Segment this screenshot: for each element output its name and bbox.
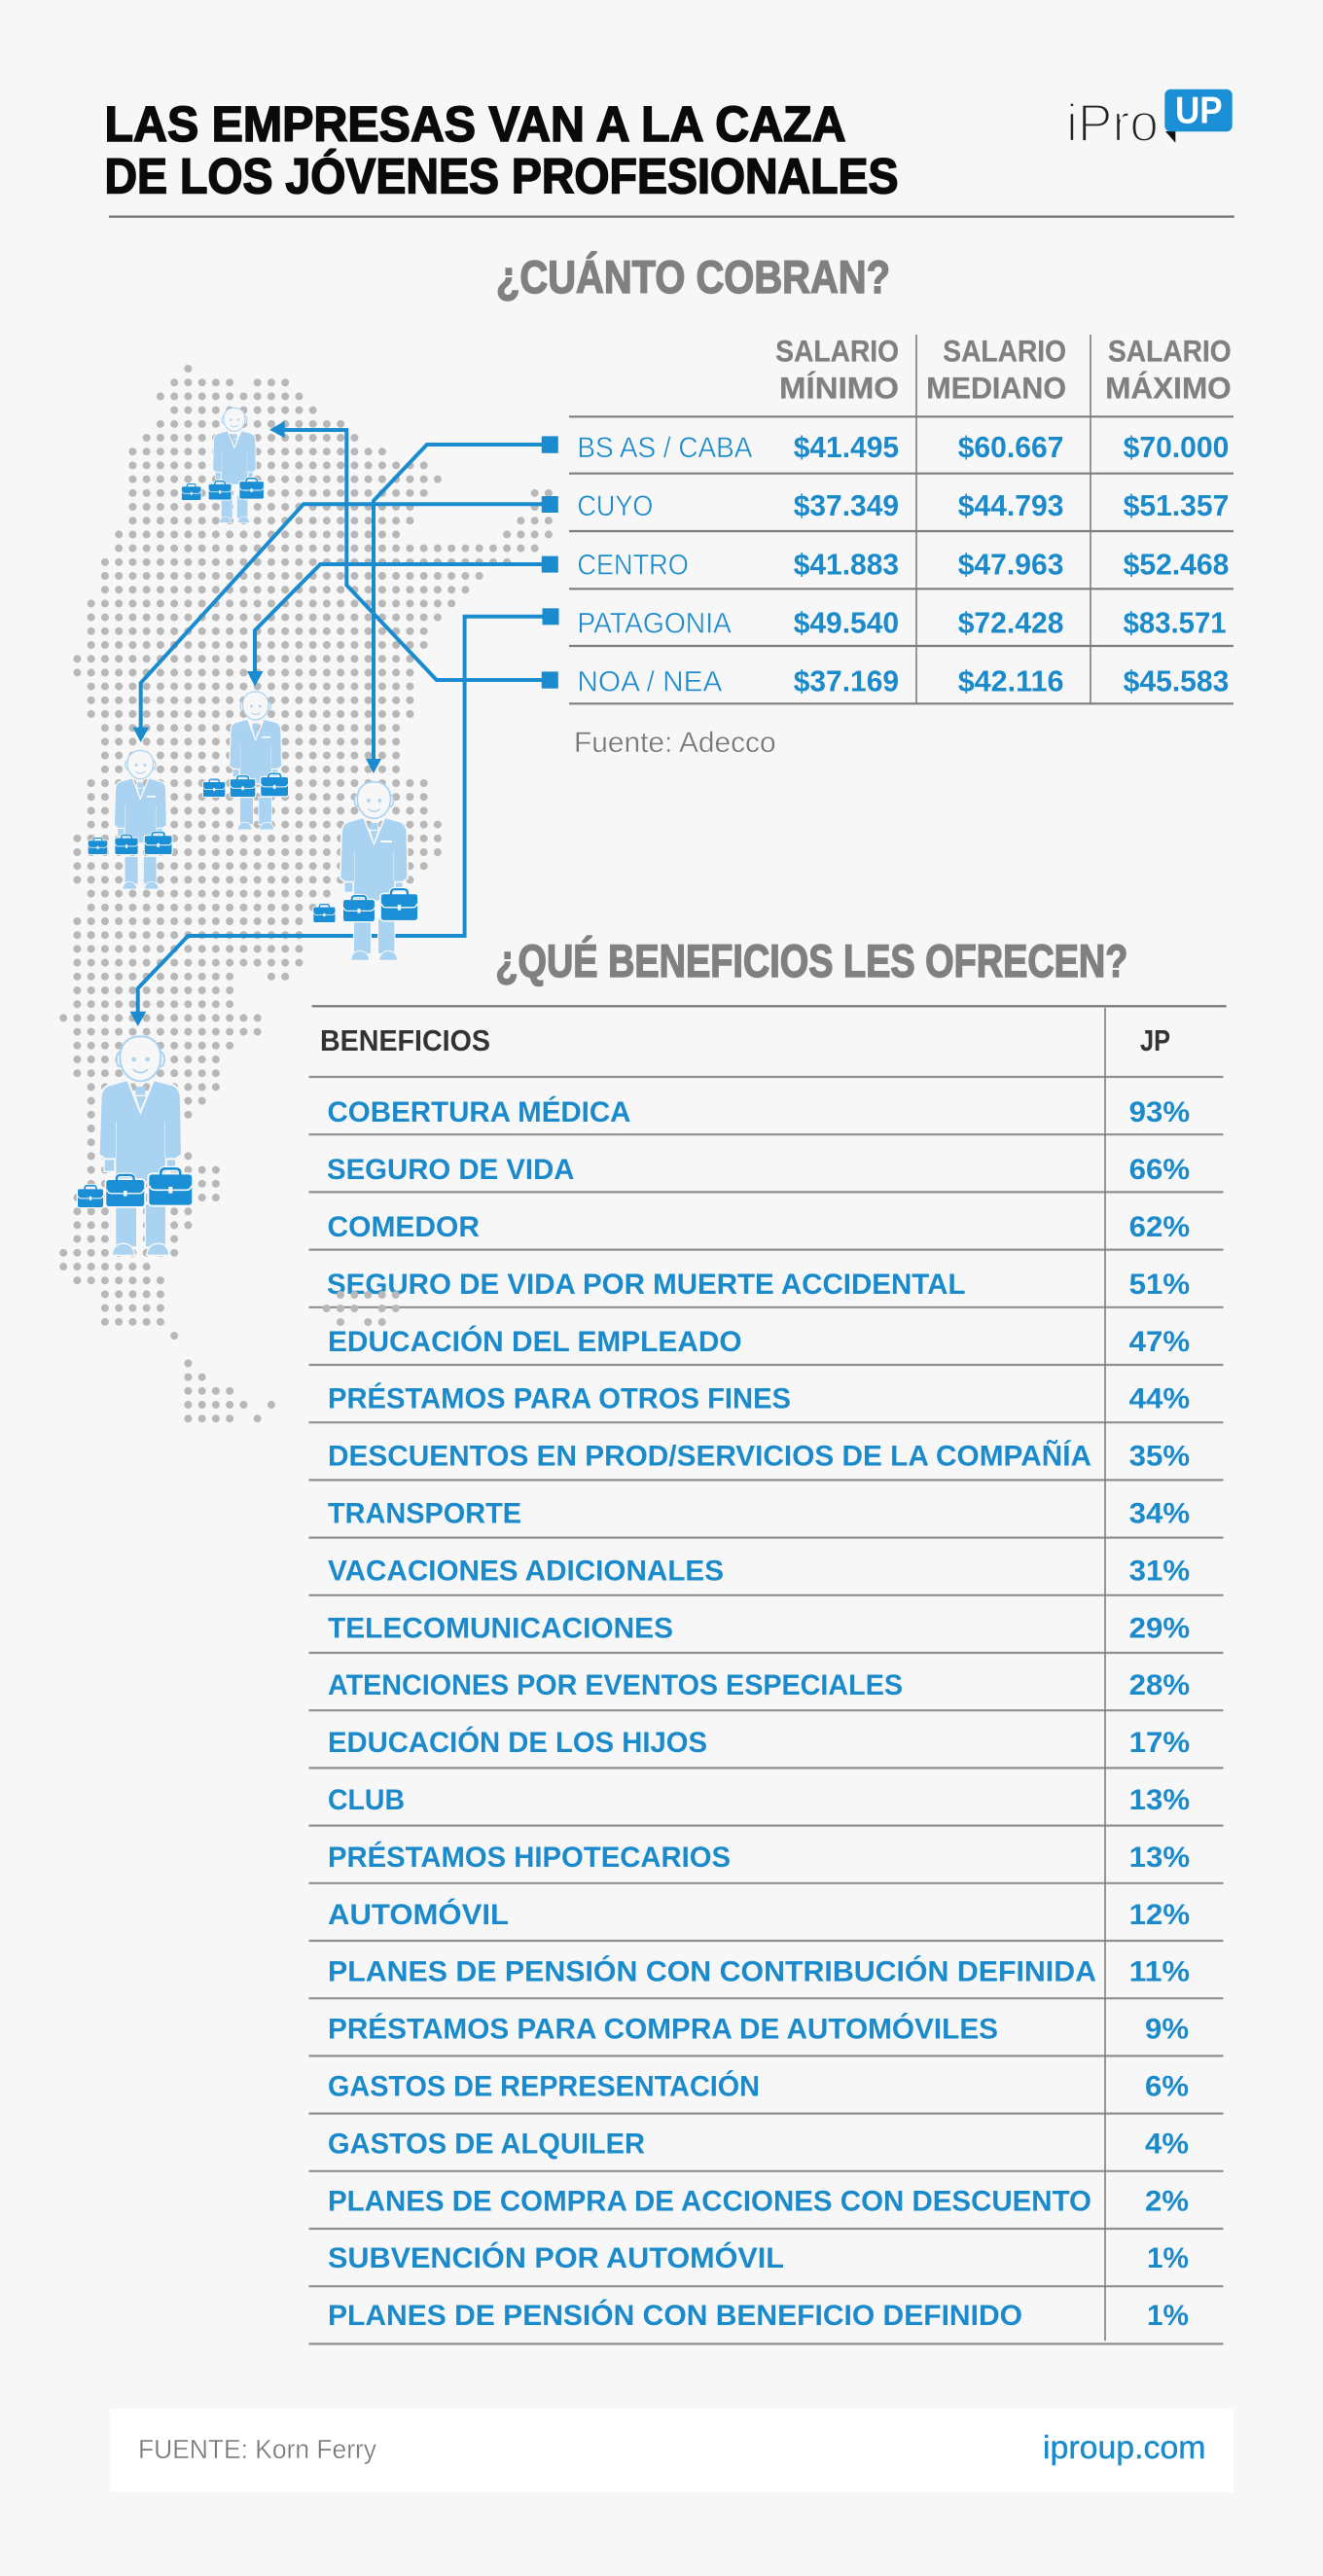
row: educación del empleado: 47%	[1129, 1326, 1190, 1358]
row: planes de pensión con contribución definida: PLANES DE PENSIÓN CON CONTRIBUCIÓN DEFINIDA	[328, 1955, 1096, 1988]
figure: BS AS / CABA worker with briefcases	[313, 782, 417, 960]
row: préstamos para compra de automóviles: PRÉSTAMOS PARA COMPRA DE AUTOMÓVILES	[328, 2013, 998, 2046]
figure: PATAGONIA worker with briefcases	[78, 1036, 192, 1255]
dotted map of Argentina	[63, 369, 549, 1418]
row: BS AS / CABA: $70.000	[1124, 430, 1229, 464]
row: atenciones por eventos especiales: 28%	[1129, 1669, 1190, 1701]
row: BS AS / CABA	[577, 430, 1229, 464]
row: comedor: 62%	[1129, 1211, 1190, 1243]
row: atenciones por eventos especiales: ATENCIONES POR EVENTOS ESPECIALES	[328, 1669, 903, 1701]
row: NOA / NEA: $42.116	[958, 663, 1064, 698]
row: descuentos: DESCUENTOS EN PROD/SERVICIOS DE LA COMPAÑÍA	[328, 1440, 1091, 1473]
row: gastos de representación: GASTOS DE REPRESENTACIÓN	[328, 2070, 760, 2103]
row: seguro de vida: 66%	[1129, 1154, 1190, 1186]
row: CENTRO	[577, 547, 1229, 582]
row: club: 13%	[1129, 1784, 1190, 1816]
row: planes de compra de acciones con descuento: 2%	[1145, 2185, 1189, 2217]
row: planes de compra de acciones con descuento: PLANES DE COMPRA DE ACCIONES CON DESCUENTO	[328, 2185, 1091, 2217]
row: BS AS / CABA: $60.667	[958, 430, 1064, 464]
row: club: CLUB	[328, 1784, 405, 1816]
stray map dots over the benefits table	[323, 1291, 400, 1326]
table header	[320, 1024, 1170, 1057]
row: planes de pensión con beneficio definido: 1%	[1147, 2300, 1189, 2332]
arrow: BS AS / CABA	[366, 436, 558, 773]
row: CENTRO: $52.468	[1124, 547, 1229, 582]
row: transporte	[328, 1498, 1190, 1529]
row: cobertura médica: 93%	[1129, 1096, 1190, 1128]
row: NOA / NEA: NOA / NEA	[577, 665, 722, 698]
figure: CENTRO worker with briefcases	[203, 692, 288, 830]
heading: qué beneficios: ¿QUÉ BENEFICIOS LES OFRECEN?	[495, 935, 1127, 986]
row: transporte: TRANSPORTE	[328, 1498, 521, 1529]
row: educación del empleado	[328, 1325, 1190, 1358]
row: vacaciones adicionales: VACACIONES ADICIONALES	[328, 1555, 724, 1587]
row: seguro de vida: SEGURO DE VIDA	[327, 1154, 574, 1186]
row: subvención por automóvil: SUBVENCIÓN POR AUTOMÓVIL	[328, 2241, 784, 2274]
website: iproup.com	[1043, 2429, 1206, 2465]
column headers: MÍNIMO	[779, 370, 899, 405]
row: automóvil: 12%	[1129, 1899, 1190, 1931]
arrow: CENTRO	[247, 556, 558, 687]
row: planes de pensión con contribución definida: 11%	[1129, 1956, 1190, 1988]
row: CENTRO: CENTRO	[577, 549, 689, 582]
column headers: SALARIO	[775, 334, 899, 369]
column headers: MÁXIMO	[1105, 370, 1232, 405]
row: NOA / NEA	[577, 663, 1229, 698]
row: educación de los hijos: 17%	[1129, 1727, 1190, 1759]
logo: iProUP: iPro	[1066, 92, 1159, 153]
row: vacaciones adicionales	[328, 1555, 1190, 1587]
source: Adecco: Fuente: Adecco	[574, 727, 776, 759]
row: vacaciones adicionales: 31%	[1129, 1555, 1190, 1587]
table header: JP	[1140, 1024, 1170, 1057]
logo: iProUP	[1066, 89, 1233, 153]
row: descuentos: 35%	[1129, 1441, 1190, 1473]
row: educación de los hijos	[328, 1726, 1190, 1759]
row: NOA / NEA: $45.583	[1124, 663, 1229, 698]
row: seguro de vida por muerte accidental: 51%	[1129, 1269, 1190, 1301]
row: telecomunicaciones: TELECOMUNICACIONES	[328, 1612, 673, 1644]
title	[105, 96, 899, 203]
row: gastos de alquiler: GASTOS DE ALQUILER	[328, 2128, 645, 2160]
row: comedor	[327, 1211, 1190, 1243]
row: planes de pensión con beneficio definido: PLANES DE PENSIÓN CON BENEFICIO DEFINIDO	[328, 2299, 1022, 2332]
row: BS AS / CABA: $41.495	[794, 430, 899, 464]
row: subvención por automóvil: 1%	[1147, 2242, 1189, 2274]
row: educación de los hijos: EDUCACIÓN DE LOS HIJOS	[328, 1726, 707, 1759]
row: gastos de alquiler: 4%	[1145, 2128, 1189, 2160]
source: Korn Ferry: FUENTE: Korn Ferry	[138, 2434, 376, 2464]
row: telecomunicaciones: 29%	[1129, 1612, 1190, 1644]
arrow: NOA / NEA	[269, 421, 558, 689]
arrow: CUYO	[132, 496, 558, 742]
row: CUYO: CUYO	[577, 490, 653, 522]
logo: iProUP: UP	[1175, 90, 1223, 132]
row: PATAGONIA: $83.571	[1124, 605, 1227, 640]
figure: NOA / NEA worker with briefcases	[182, 408, 264, 522]
row: CENTRO: $47.963	[958, 547, 1064, 582]
row: CENTRO: $41.883	[794, 547, 899, 582]
footer bar	[110, 2409, 1234, 2492]
connector lines and arrows	[130, 421, 558, 1026]
row: CUYO	[577, 488, 1229, 522]
column headers: SALARIO	[943, 334, 1066, 369]
benefits table	[309, 1006, 1227, 2343]
table header: BENEFICIOS	[320, 1024, 490, 1057]
title: LAS EMPRESAS VAN A LA CAZA	[105, 96, 846, 152]
row: automóvil	[328, 1898, 1190, 1931]
row: gastos de alquiler	[328, 2128, 1189, 2160]
row: gastos de representación: 6%	[1145, 2070, 1189, 2103]
row: club	[328, 1784, 1190, 1816]
row: PATAGONIA: PATAGONIA	[577, 607, 732, 640]
salary table	[569, 334, 1234, 703]
row: préstamos para otros fines: PRÉSTAMOS PARA OTROS FINES	[328, 1382, 791, 1415]
row: préstamos para otros fines: 44%	[1129, 1383, 1190, 1415]
row: CUYO: $37.349	[794, 488, 899, 522]
row: préstamos para otros fines	[328, 1382, 1190, 1415]
row: CUYO: $44.793	[958, 488, 1064, 522]
title: DE LOS JÓVENES PROFESIONALES	[105, 148, 899, 203]
row: transporte: 34%	[1129, 1498, 1190, 1529]
row: BS AS / CABA: BS AS / CABA	[577, 432, 752, 464]
row: préstamos hipotecarios: 13%	[1129, 1842, 1190, 1874]
figure: CUYO worker with briefcases	[89, 750, 172, 889]
row: seguro de vida	[327, 1154, 1190, 1186]
arrow: PATAGONIA	[130, 608, 558, 1026]
row: comedor: COMEDOR	[327, 1211, 480, 1243]
row: telecomunicaciones	[328, 1612, 1190, 1644]
row: seguro de vida por muerte accidental: SEGURO DE VIDA POR MUERTE ACCIDENTAL	[327, 1269, 965, 1301]
column headers	[775, 334, 1232, 405]
column headers: MEDIANO	[926, 370, 1066, 405]
row: NOA / NEA: $37.169	[794, 663, 899, 698]
row: cobertura médica	[327, 1095, 1190, 1128]
row: cobertura médica: COBERTURA MÉDICA	[327, 1095, 630, 1128]
row: préstamos hipotecarios: PRÉSTAMOS HIPOTECARIOS	[328, 1841, 731, 1874]
row: PATAGONIA: $72.428	[958, 605, 1064, 640]
row: gastos de representación	[328, 2070, 1189, 2103]
row: préstamos para compra de automóviles: 9%	[1145, 2014, 1189, 2046]
row: atenciones por eventos especiales	[328, 1669, 1190, 1701]
row: PATAGONIA	[577, 605, 1227, 640]
row: préstamos hipotecarios	[328, 1841, 1190, 1874]
row: subvención por automóvil	[328, 2241, 1189, 2274]
heading: cuánto cobran: ¿CUÁNTO COBRAN?	[496, 251, 890, 303]
row: PATAGONIA: $49.540	[794, 605, 899, 640]
row: automóvil: AUTOMÓVIL	[328, 1898, 509, 1931]
row: CUYO: $51.357	[1124, 488, 1229, 522]
row: educación del empleado: EDUCACIÓN DEL EMPLEADO	[328, 1325, 742, 1358]
column headers: SALARIO	[1108, 334, 1232, 369]
